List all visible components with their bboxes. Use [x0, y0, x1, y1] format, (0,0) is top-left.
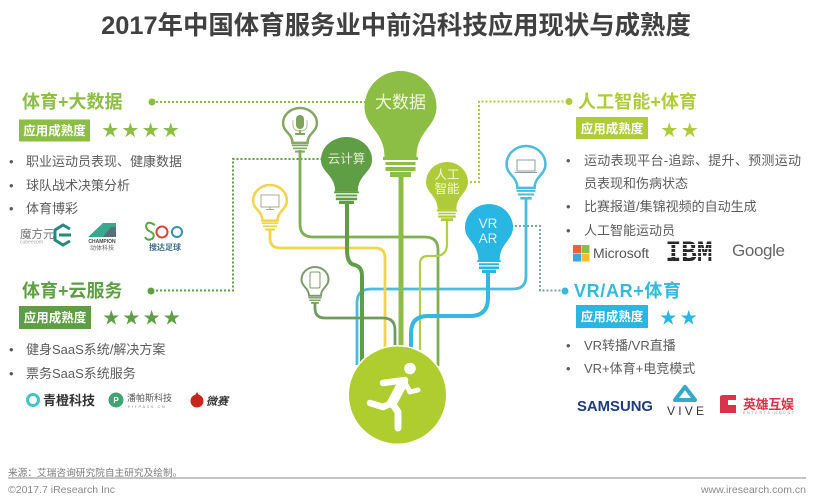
bullet list: [9, 154, 182, 216]
logos: 英雄互娱: [743, 397, 794, 412]
logos: FITPASS.CN: [128, 404, 166, 409]
heading: 人工智能+体育: [578, 91, 697, 112]
bulb: VR AR: [465, 204, 513, 273]
footer source: 来源：艾瑞咨询研究院自主研究及绘制。: [8, 466, 182, 479]
bullet list: 健身SaaS系统/解决方案: [26, 342, 165, 357]
maturity tag: 应用成熟度: [24, 310, 87, 325]
maturity tag: 应用成熟度: [581, 309, 644, 324]
logos: Microsoft: [593, 245, 649, 261]
maturity tag: 应用成熟度: [581, 121, 644, 136]
bullet list: •: [566, 223, 571, 238]
bulb: artificial intelligence: 人工: [434, 168, 460, 182]
bullet list: [566, 338, 695, 376]
heading: 体育+云服务: [22, 280, 123, 301]
bullet list: •: [566, 199, 571, 214]
bulb: cloud computing: 云计算: [328, 151, 365, 166]
bullet list: VR转播/VR直播: [584, 338, 676, 353]
bulb: laptop outline: [507, 146, 545, 200]
bullet list: 球队战术决策分析: [26, 178, 130, 193]
maturity tag: [576, 305, 648, 328]
maturity tag: [576, 117, 648, 139]
logos: VIVE: [667, 404, 704, 418]
footer copyright: ©2017.7 iResearch Inc: [8, 484, 115, 496]
bulb: monitor outline: [253, 185, 287, 231]
hub circle with runner: [348, 345, 448, 445]
bullet list: •: [566, 361, 571, 376]
bulb: phone outline: [302, 267, 328, 304]
icon: microphone: [293, 115, 307, 135]
bullet list: 体育博彩: [26, 201, 78, 216]
bullet list: VR+体育+电竞模式: [584, 361, 695, 376]
logos: 青橙科技: [43, 393, 95, 408]
icon: monitor: [261, 195, 279, 210]
logos: Google: [732, 241, 785, 260]
bullet list: •: [566, 338, 571, 353]
bullet list: 员表现和伤病状态: [584, 176, 688, 191]
logos: SAMSUNG: [577, 398, 653, 415]
bulb: big data: 大数据: [375, 93, 426, 112]
bulb: cloud computing: [321, 137, 372, 204]
logos: [573, 237, 785, 271]
bullet list: 运动表现平台-追踪、提升、预测运动: [584, 153, 801, 168]
bullet list: •: [9, 342, 14, 357]
bulb: microphone outline: [283, 108, 317, 153]
panel: sports + cloud services: [9, 280, 230, 409]
bulb: big data: [364, 71, 436, 177]
maturity tag: [19, 306, 91, 329]
logos: CHAMPION: [88, 239, 116, 245]
bulb: VR AR: AR: [479, 231, 498, 246]
logos: [20, 223, 182, 252]
icon: phone: [310, 272, 320, 288]
heading: 体育+大数据: [22, 91, 123, 112]
bullet list: •: [9, 201, 14, 216]
icon: runner: [370, 363, 418, 428]
maturity tag: [19, 120, 90, 142]
logos: 微赛: [206, 395, 230, 408]
logos: ENTERTAINMENT: [743, 411, 795, 415]
icon: laptop: [515, 160, 537, 172]
bullet list: •: [9, 154, 14, 169]
logos: 搜达足球: [149, 242, 181, 252]
stars: ★★: [661, 122, 698, 140]
maturity tag: 应用成熟度: [23, 123, 86, 138]
bullet list: 比赛报道/集锦视频的自动生成: [584, 199, 757, 214]
bullet list: [9, 342, 165, 381]
panel: AI + sports: [566, 91, 801, 271]
logos: [577, 387, 795, 418]
panel: sports + big data: [9, 91, 182, 252]
dotted connectors: [152, 102, 568, 290]
stars: ★★: [660, 310, 697, 328]
bulb: artificial intelligence: [426, 162, 468, 221]
stars: ★★★★: [102, 122, 179, 140]
bullet list: 人工智能运动员: [584, 223, 675, 238]
logos: IBM: [666, 237, 712, 271]
bulb: VR AR: VR: [479, 216, 498, 231]
bullet list: 票务SaaS系统服务: [26, 366, 136, 381]
bullet list: •: [566, 153, 571, 168]
logos: 潘帕斯科技: [127, 392, 172, 403]
logos: P: [113, 396, 119, 405]
title: 2017年中国体育服务业中前沿科技应用现状与成熟度: [101, 11, 691, 40]
footer website: www.iresearch.com.cn: [700, 484, 806, 496]
bullet list: •: [9, 178, 14, 193]
bullet list: 职业运动员表现、健康数据: [26, 154, 182, 169]
heading: VR/AR+体育: [574, 280, 681, 301]
stars: ★★★★: [103, 310, 180, 328]
bullet list: [566, 153, 801, 238]
logos: cubeecom: [20, 240, 43, 246]
bullet list: •: [9, 366, 14, 381]
logos: 魔方元: [20, 227, 55, 241]
connecting cables: [270, 150, 526, 366]
logos: [28, 392, 230, 409]
bulb: artificial intelligence: 智能: [434, 181, 460, 196]
logos: 动体科技: [90, 244, 114, 252]
panel: VR/AR + sports: [562, 280, 795, 418]
